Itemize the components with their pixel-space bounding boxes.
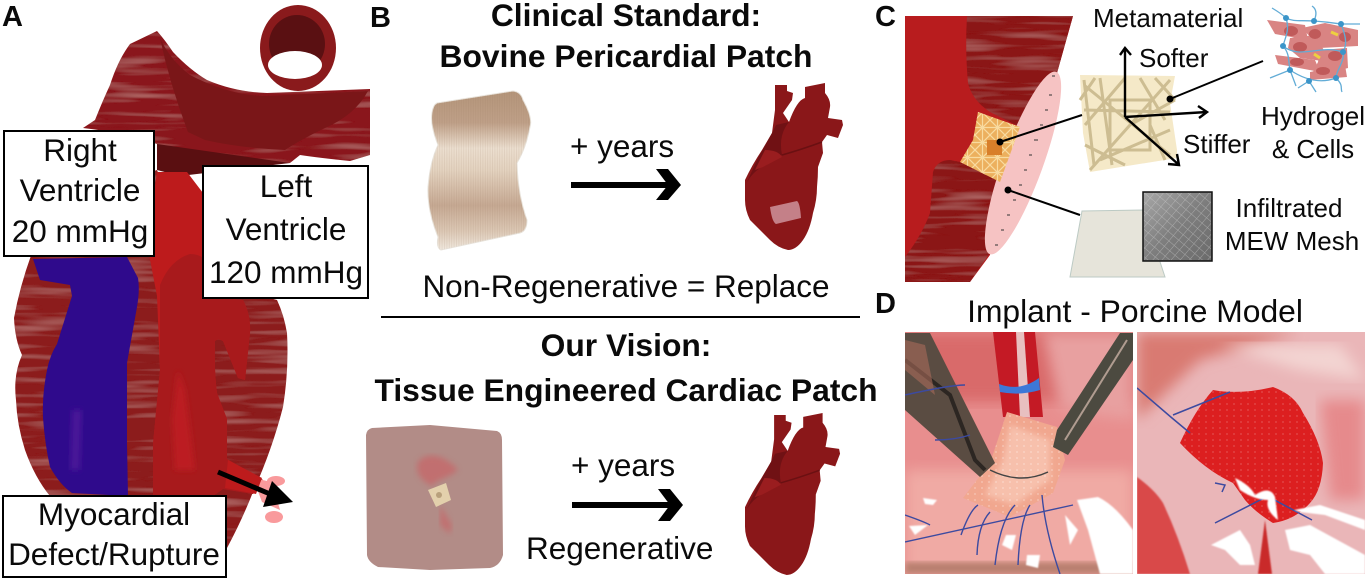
label: regenerative: Regenerative	[526, 530, 713, 566]
arrow: rupture direction	[218, 472, 293, 507]
label: myocardial defect: Myocardial	[38, 496, 190, 532]
label: right ventricle	[4, 131, 154, 256]
panel letter B: B	[370, 2, 391, 34]
label: plus years: + years	[571, 447, 675, 483]
label: left ventricle: Ventricle	[226, 211, 346, 247]
metamaterial scaffold in defect	[960, 112, 1020, 182]
image: infiltrated MEW mesh	[1070, 192, 1212, 277]
label: myocardial defect: Defect/Rupture	[8, 536, 220, 572]
arrow: clinical standard	[571, 169, 681, 200]
label: left ventricle: 120 mmHg	[209, 254, 363, 290]
label: stiffer: Stiffer	[1183, 129, 1251, 159]
caption: non-regenerative: Non-Regenerative = Replace	[422, 268, 830, 304]
label: right ventricle: Ventricle	[20, 172, 140, 208]
pink outer mesh patch	[971, 65, 1075, 261]
label: softer: Softer	[1139, 43, 1209, 73]
panel B: clinical standard vs vision	[366, 0, 878, 575]
image: bovine pericardial patch	[428, 91, 531, 250]
right ventricle cavity	[33, 257, 139, 496]
label: right ventricle: 20 mmHg	[12, 213, 148, 249]
heading: our vision	[374, 327, 878, 408]
leader lines	[998, 61, 1263, 215]
stiffness axes	[1120, 48, 1207, 165]
label: hydrogel and cells: Hydrogel	[1261, 101, 1365, 131]
heading: clinical standard: Bovine Pericardial Patch	[440, 38, 812, 74]
label: plus years: + years	[570, 128, 674, 164]
label: left ventricle	[203, 166, 368, 298]
label: hydrogel and cells	[1261, 101, 1365, 164]
heading: implant porcine model: Implant - Porcine Model	[967, 293, 1303, 329]
panel letter C: C	[875, 1, 896, 33]
label: infiltrated MEW mesh	[1225, 193, 1359, 256]
label: infiltrated MEW mesh: MEW Mesh	[1225, 226, 1359, 256]
divider line	[381, 316, 860, 318]
heart with inert patch	[745, 83, 843, 250]
heart vessel: pulmonary ring	[260, 5, 336, 91]
panel A: heart cross-section	[2, 1, 370, 577]
label: left ventricle: Left	[260, 168, 313, 204]
photo: patch being sutured	[905, 332, 1133, 574]
panel C: patch design	[875, 1, 1365, 282]
rupture: pink blood leak	[253, 476, 285, 523]
arrow: vision	[572, 489, 683, 521]
photo: implanted patch with blood	[1137, 332, 1365, 574]
panel D: porcine implant photos	[875, 288, 1365, 574]
label: metamaterial: Metamaterial	[1093, 3, 1243, 33]
heart vessel: aortic arch	[83, 31, 370, 176]
metamaterial cube	[1080, 75, 1177, 172]
heading: clinical standard	[440, 0, 812, 74]
heading: our vision: Tissue Engineered Cardiac Patch	[374, 372, 878, 408]
heart regenerated	[745, 413, 840, 575]
rupture channel	[225, 460, 262, 494]
heart body myocardium	[14, 170, 288, 548]
image: tissue engineered patch	[366, 425, 503, 570]
panel letter A: A	[2, 1, 23, 33]
heading: our vision: Our Vision:	[541, 327, 711, 363]
heart wall cross-section	[905, 16, 1073, 282]
label: right ventricle: Right	[43, 132, 117, 168]
panel letter D: D	[875, 288, 896, 320]
label: myocardial defect	[3, 496, 226, 577]
label: infiltrated MEW mesh: Infiltrated	[1236, 193, 1342, 223]
label: hydrogel and cells: & Cells	[1272, 134, 1354, 164]
icon: hydrogel and cells	[1267, 6, 1360, 92]
left ventricle cavity	[147, 172, 263, 496]
